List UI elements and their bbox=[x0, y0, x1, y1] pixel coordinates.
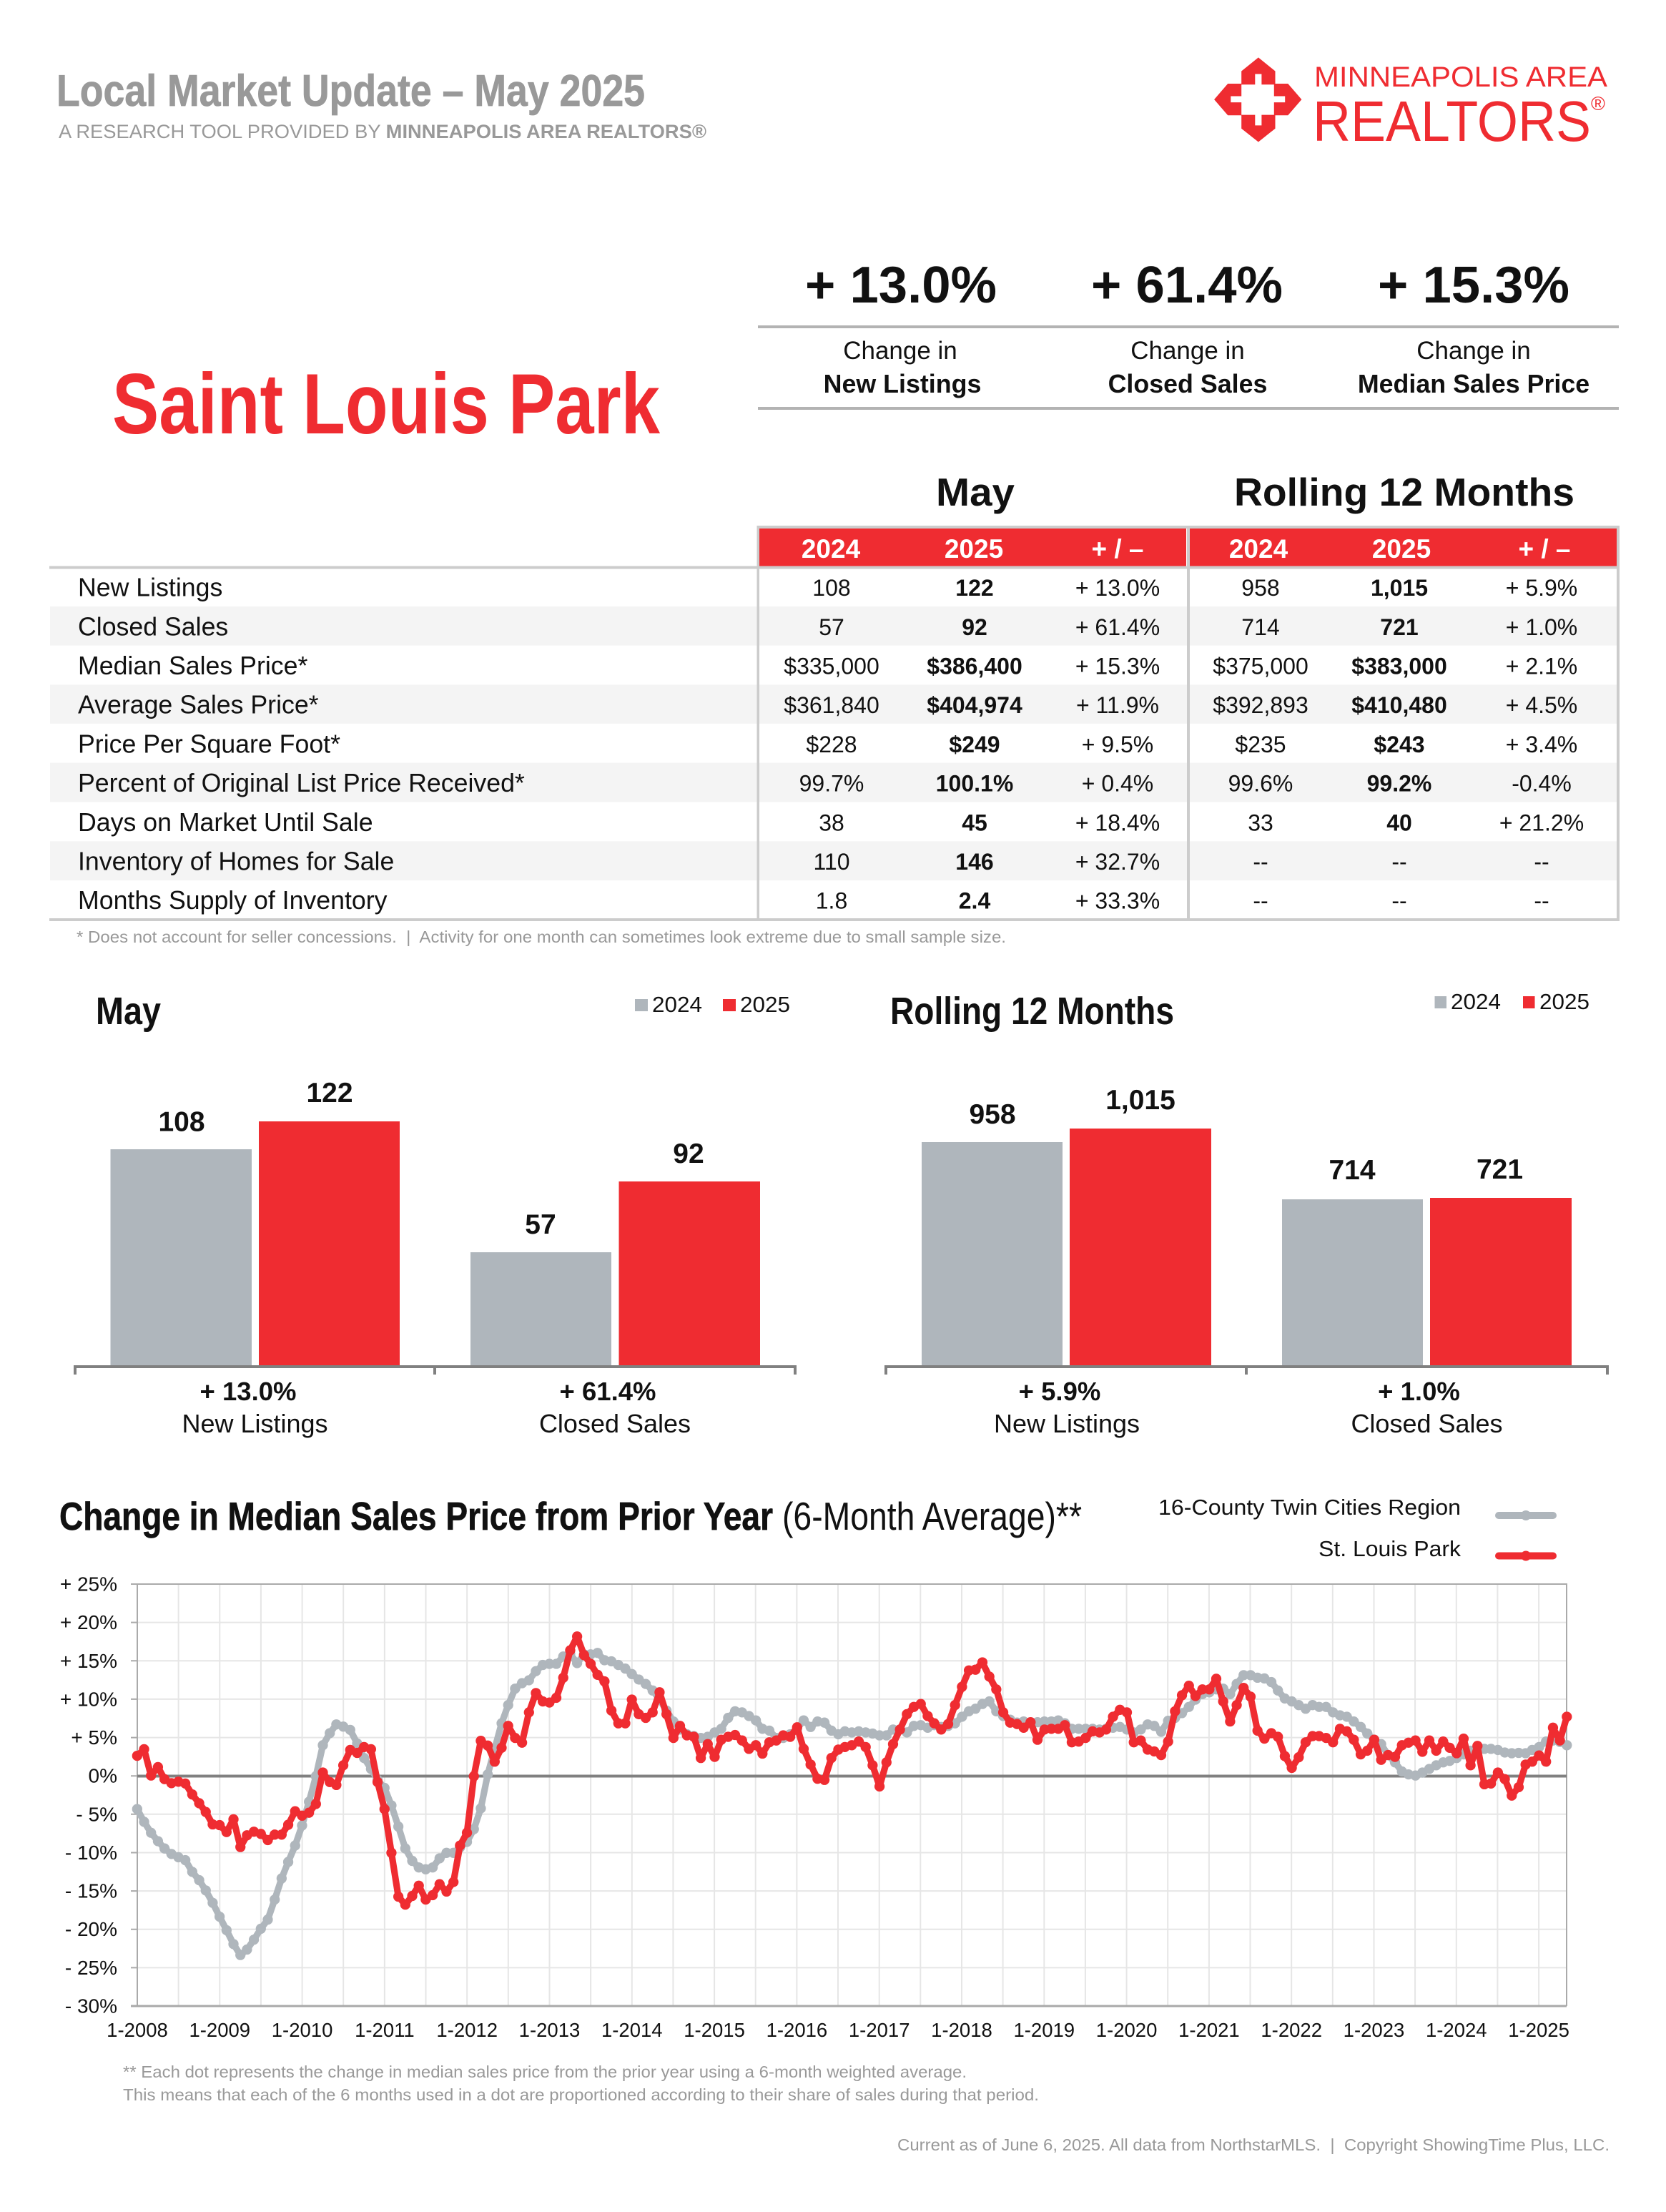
row: Closed Sales: 57 bbox=[819, 614, 844, 640]
bars: New Listings: 122 bbox=[306, 1078, 353, 1109]
logo wordmark: ® bbox=[1591, 93, 1605, 114]
row: Inventory of Homes for Sale: Inventory of Homes for Sale bbox=[78, 847, 394, 875]
row: New Listings: 108 bbox=[812, 575, 851, 601]
row: Closed Sales: 92 bbox=[962, 614, 987, 640]
bars: New Listings bbox=[110, 1078, 400, 1367]
row: Average Sales Price: $404,974 bbox=[927, 692, 1022, 718]
bars: Closed Sales bbox=[470, 1139, 760, 1367]
bars: New Listings: 958 bbox=[969, 1099, 1016, 1130]
row: Price Per Square Foot: + 3.4% bbox=[1506, 732, 1577, 757]
stat: median sales price: Change in bbox=[1416, 337, 1531, 365]
row: Price Per Square Foot: $243 bbox=[1374, 732, 1425, 757]
row: Closed Sales: 714 bbox=[1241, 614, 1280, 640]
row: Percent of Original List Price Received: Percent of Original List Price Received* bbox=[78, 769, 525, 797]
row: New Listings: 958 bbox=[1241, 575, 1280, 601]
stat: median sales price: Median Sales Price bbox=[1358, 370, 1589, 398]
row: Price Per Square Foot: $249 bbox=[949, 732, 1000, 757]
logo wordmark: MINNEAPOLIS AREA bbox=[1314, 62, 1607, 93]
row: Inventory of Homes for Sale: -- bbox=[1253, 849, 1268, 875]
x axis labels: 1-2012 bbox=[436, 2019, 498, 2041]
bars: New Listings: 1,015 bbox=[1105, 1085, 1175, 1116]
stat: median sales price: + 15.3% bbox=[1378, 256, 1569, 314]
heading: line chart title: (6-Month Average)** bbox=[782, 1494, 1082, 1538]
row: New Listings: 1,015 bbox=[1371, 575, 1428, 601]
row: Average Sales Price: $361,840 bbox=[784, 692, 879, 718]
row: Percent of Original List Price Received: 100.1% bbox=[936, 771, 1013, 797]
row: Percent of Original List Price Received: + 0.4% bbox=[1082, 771, 1153, 797]
table header row: 2025 bbox=[1372, 534, 1431, 564]
stat: new listings: Change in bbox=[843, 337, 957, 365]
x axis labels: 1-2013 bbox=[519, 2019, 580, 2041]
row: Average Sales Price: + 11.9% bbox=[1076, 692, 1159, 718]
y axis labels: - 30% bbox=[65, 1995, 117, 2017]
series: St. Louis Park bbox=[137, 1636, 1567, 1904]
row: Closed Sales: + 1.0% bbox=[1506, 614, 1577, 640]
panel: Rolling 12 Months bar chart bbox=[886, 989, 1607, 1438]
x axis labels: 1-2025 bbox=[1508, 2019, 1569, 2041]
line chart legend bbox=[1158, 1495, 1553, 1561]
row: Inventory of Homes for Sale: 146 bbox=[955, 849, 994, 875]
source credit: Current as of June 6, 2025. All data from NorthstarMLS. | Copyright ShowingTime Plus, LLC. bbox=[897, 2135, 1610, 2154]
panel: May bar chart bbox=[75, 990, 795, 1438]
label: New Listings change: New Listings bbox=[182, 1409, 328, 1438]
y axis labels: + 25% bbox=[60, 1573, 117, 1595]
row: Average Sales Price: Average Sales Price* bbox=[78, 691, 319, 719]
y axis labels: - 25% bbox=[65, 1957, 117, 1979]
x axis labels: 1-2024 bbox=[1426, 2019, 1487, 2041]
stat: closed sales: Change in bbox=[1130, 337, 1245, 365]
y axis labels: - 20% bbox=[65, 1918, 117, 1940]
x axis labels: 1-2015 bbox=[684, 2019, 745, 2041]
x axis labels bbox=[107, 2019, 1569, 2041]
stat: median sales price bbox=[1358, 256, 1589, 398]
row: Months Supply of Inventory bbox=[78, 886, 1549, 915]
row: Median Sales Price: Median Sales Price* bbox=[78, 652, 307, 680]
stat: closed sales: Closed Sales bbox=[1108, 370, 1267, 398]
y axis labels: + 15% bbox=[60, 1650, 117, 1672]
subtitle: A RESEARCH TOOL PROVIDED BY MINNEAPOLIS AREA REALTORS® bbox=[59, 121, 706, 142]
row: Price Per Square Foot: Price Per Square Foot* bbox=[78, 729, 340, 758]
heading: line chart title: Change in Median Sales Price from Prior Year bbox=[59, 1494, 773, 1538]
row: Price Per Square Foot: $228 bbox=[806, 732, 857, 757]
label: Closed Sales change: + 61.4% bbox=[560, 1377, 656, 1406]
title: Local Market Update – May 2025 bbox=[56, 67, 645, 116]
y axis labels bbox=[60, 1573, 117, 2017]
row: Closed Sales: + 61.4% bbox=[1075, 614, 1160, 640]
y axis labels: - 15% bbox=[65, 1880, 117, 1902]
stat: closed sales: + 61.4% bbox=[1091, 256, 1283, 314]
row: Closed Sales: 721 bbox=[1380, 614, 1419, 640]
x axis labels: 1-2019 bbox=[1013, 2019, 1075, 2041]
row: Price Per Square Foot: $235 bbox=[1235, 732, 1286, 757]
bars: New Listings bbox=[922, 1085, 1211, 1367]
x axis labels: 1-2023 bbox=[1344, 2019, 1404, 2041]
row: Median Sales Price: $375,000 bbox=[1213, 654, 1308, 679]
label: Closed Sales change bbox=[1351, 1377, 1503, 1438]
y axis labels: + 20% bbox=[60, 1611, 117, 1633]
x axis labels: 1-2022 bbox=[1261, 2019, 1322, 2041]
row: Days on Market Until Sale: 33 bbox=[1248, 810, 1273, 835]
chart footnote: This means that each of the 6 months used in a dot are proportioned according to their share of sales during that period. bbox=[123, 2085, 1039, 2104]
heading: Saint Louis Park: Saint Louis Park bbox=[112, 356, 660, 452]
table footnote: * Does not account for seller concessions. | Activity for one month can sometimes look extreme due to small sample size. bbox=[77, 928, 1006, 946]
row: Inventory of Homes for Sale: + 32.7% bbox=[1075, 849, 1160, 875]
legend bbox=[635, 992, 790, 1017]
label: New Listings change: New Listings bbox=[994, 1409, 1140, 1438]
x axis labels: 1-2009 bbox=[189, 2019, 250, 2041]
y axis labels: - 5% bbox=[76, 1803, 117, 1825]
row: Average Sales Price: + 4.5% bbox=[1506, 692, 1577, 718]
label: New Listings change: + 5.9% bbox=[1019, 1377, 1100, 1406]
row: Percent of Original List Price Received: -0.4% bbox=[1512, 771, 1572, 797]
x axis labels: 1-2018 bbox=[931, 2019, 992, 2041]
chart footnote bbox=[123, 2063, 1039, 2104]
bars: Closed Sales: 714 bbox=[1329, 1155, 1376, 1186]
label: Closed Sales change bbox=[539, 1377, 691, 1438]
x axis labels: 1-2008 bbox=[107, 2019, 168, 2041]
row: Months Supply of Inventory: -- bbox=[1253, 888, 1268, 914]
x axis labels: 1-2016 bbox=[767, 2019, 827, 2041]
row: Average Sales Price bbox=[78, 691, 1577, 719]
panel: data table bbox=[49, 470, 1620, 921]
legend: 2025 bbox=[740, 992, 790, 1017]
chart footnote: ** Each dot represents the change in median sales price from the prior year using a 6-month weighted average. bbox=[123, 2063, 967, 2081]
legend: 2024 bbox=[652, 992, 702, 1017]
label: Closed Sales change: Closed Sales bbox=[539, 1409, 691, 1438]
row: Months Supply of Inventory: -- bbox=[1534, 888, 1549, 914]
label: New Listings change bbox=[994, 1377, 1140, 1438]
row: Median Sales Price: $386,400 bbox=[927, 654, 1022, 679]
line chart legend: St. Louis Park bbox=[1318, 1536, 1462, 1561]
row: Closed Sales bbox=[78, 612, 1577, 641]
table heading: May: May bbox=[936, 470, 1015, 514]
row: Median Sales Price: $335,000 bbox=[784, 654, 879, 679]
label: New Listings change: + 13.0% bbox=[200, 1377, 296, 1406]
heading: Rolling 12 Months: Rolling 12 Months bbox=[890, 990, 1174, 1033]
row: New Listings bbox=[78, 574, 1577, 602]
row: Days on Market Until Sale: Days on Market Until Sale bbox=[78, 808, 373, 837]
row: Percent of Original List Price Received: 99.6% bbox=[1228, 771, 1293, 797]
row: Days on Market Until Sale: + 21.2% bbox=[1499, 810, 1584, 835]
row: New Listings: + 5.9% bbox=[1506, 575, 1577, 601]
x axis labels: 1-2017 bbox=[849, 2019, 910, 2041]
stat: closed sales bbox=[1091, 256, 1283, 398]
stat: new listings: New Listings bbox=[824, 370, 981, 398]
heading: May: May bbox=[96, 990, 161, 1033]
row: Days on Market Until Sale: 40 bbox=[1386, 810, 1412, 835]
row: Months Supply of Inventory: 1.8 bbox=[816, 888, 847, 914]
panel: key change statistics bbox=[758, 256, 1619, 410]
table header row: 2025 bbox=[945, 534, 1003, 564]
line chart legend: 16-County Twin Cities Region bbox=[1158, 1495, 1461, 1520]
table header row bbox=[759, 529, 1617, 566]
row: Inventory of Homes for Sale: -- bbox=[1534, 849, 1549, 875]
y axis labels: + 5% bbox=[71, 1726, 117, 1749]
stat: new listings bbox=[805, 256, 997, 398]
x axis labels: 1-2010 bbox=[272, 2019, 332, 2041]
row: Average Sales Price: $392,893 bbox=[1213, 692, 1308, 718]
legend: 2024 bbox=[1451, 989, 1501, 1014]
row: Inventory of Homes for Sale bbox=[78, 847, 1549, 875]
line chart bbox=[60, 1573, 1569, 2041]
bars: New Listings: 108 bbox=[158, 1107, 205, 1137]
row: Percent of Original List Price Received: 99.2% bbox=[1367, 771, 1431, 797]
table header row: 2024 bbox=[1229, 534, 1288, 564]
row: Days on Market Until Sale bbox=[78, 808, 1584, 837]
row: Average Sales Price: $410,480 bbox=[1351, 692, 1447, 718]
y axis labels: + 10% bbox=[60, 1688, 117, 1710]
logo wordmark bbox=[1313, 62, 1607, 153]
row: Median Sales Price: $383,000 bbox=[1351, 654, 1447, 679]
x axis labels: 1-2020 bbox=[1096, 2019, 1157, 2041]
row: Percent of Original List Price Received bbox=[78, 769, 1572, 797]
x axis labels: 1-2021 bbox=[1178, 2019, 1240, 2041]
row: Price Per Square Foot bbox=[78, 729, 1577, 758]
y axis labels: 0% bbox=[89, 1765, 117, 1787]
row: New Listings: + 13.0% bbox=[1075, 575, 1160, 601]
table header row: + / – bbox=[1091, 534, 1144, 564]
row: Median Sales Price: + 2.1% bbox=[1506, 654, 1577, 679]
row: Months Supply of Inventory: Months Supply of Inventory bbox=[78, 886, 388, 915]
bars: Closed Sales bbox=[1282, 1154, 1572, 1367]
row: Median Sales Price bbox=[78, 652, 1577, 680]
table header row: + / – bbox=[1518, 534, 1571, 564]
bars: Closed Sales: 57 bbox=[525, 1209, 556, 1240]
y axis labels: - 10% bbox=[65, 1842, 117, 1864]
table header row: 2024 bbox=[802, 534, 861, 564]
row: Months Supply of Inventory: + 33.3% bbox=[1075, 888, 1160, 914]
row: Percent of Original List Price Received: 99.7% bbox=[799, 771, 864, 797]
row: Inventory of Homes for Sale: -- bbox=[1391, 849, 1407, 875]
row: Days on Market Until Sale: 38 bbox=[819, 810, 844, 835]
bars: Closed Sales: 92 bbox=[673, 1139, 704, 1169]
x axis labels: 1-2014 bbox=[601, 2019, 663, 2041]
logo wordmark: REALTORS bbox=[1313, 89, 1591, 153]
logo bbox=[1214, 57, 1607, 153]
bars: Closed Sales: 721 bbox=[1477, 1154, 1523, 1185]
table heading: Rolling 12 Months: Rolling 12 Months bbox=[1234, 470, 1574, 514]
row: Days on Market Until Sale: 45 bbox=[962, 810, 987, 835]
x axis labels: 1-2011 bbox=[355, 2019, 415, 2041]
row: Closed Sales: Closed Sales bbox=[78, 612, 228, 641]
row: Price Per Square Foot: + 9.5% bbox=[1082, 732, 1153, 757]
row: Inventory of Homes for Sale: 110 bbox=[813, 849, 850, 875]
label: Closed Sales change: + 1.0% bbox=[1378, 1377, 1460, 1406]
icon: realtors cross bbox=[1214, 57, 1301, 142]
legend: 2025 bbox=[1539, 989, 1589, 1014]
row: Months Supply of Inventory: 2.4 bbox=[959, 888, 990, 914]
row: New Listings: 122 bbox=[955, 575, 994, 601]
series: 16-County Twin Cities Region bbox=[137, 1653, 1567, 1955]
stat: new listings: + 13.0% bbox=[805, 256, 997, 314]
label: New Listings change bbox=[182, 1377, 328, 1438]
row: New Listings: New Listings bbox=[78, 574, 222, 602]
row: Median Sales Price: + 15.3% bbox=[1075, 654, 1160, 679]
row: Months Supply of Inventory: -- bbox=[1391, 888, 1407, 914]
label: Closed Sales change: Closed Sales bbox=[1351, 1409, 1503, 1438]
row: Days on Market Until Sale: + 18.4% bbox=[1075, 810, 1160, 835]
legend bbox=[1434, 989, 1589, 1014]
